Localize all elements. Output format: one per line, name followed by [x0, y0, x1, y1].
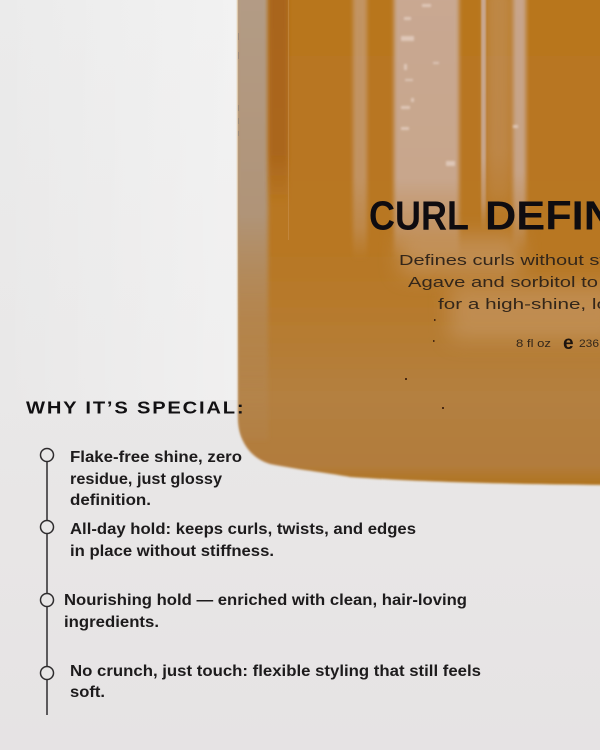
benefit 4: soft. [70, 684, 105, 701]
jar specks [405, 319, 444, 409]
jar label title: CURL [369, 192, 469, 238]
benefit 4 [70, 663, 481, 701]
benefit 3 [64, 592, 467, 631]
jar label volume: 8 fl oz [516, 338, 551, 350]
benefit 1: definition. [70, 492, 151, 509]
jar edge marks [238, 33, 239, 136]
jar glare specks [401, 4, 518, 166]
jar thin line [288, 0, 289, 240]
jar left edge reflection [236, 0, 268, 440]
benefit 4: No crunch, just touch: flexible styling that still feels [70, 663, 481, 680]
jar label line 3: for a high-shine, lo [438, 296, 600, 313]
timeline marker 1 [40, 448, 54, 462]
benefit 1: Flake-free shine, zero [70, 449, 242, 466]
heading: WHY IT’S SPECIAL: [26, 398, 245, 418]
jar label title [370, 201, 600, 230]
timeline marker 2 [40, 520, 54, 534]
jar dark band [269, 0, 288, 205]
jar label line 2: Agave and sorbitol to [408, 274, 598, 291]
benefit 2: in place without stiffness. [70, 543, 274, 560]
benefit 2 [70, 521, 416, 560]
timeline marker 4 [40, 666, 54, 680]
jar label volume metric: 236 [579, 338, 599, 350]
benefit 3: ingredients. [64, 614, 159, 631]
benefit 3: Nourishing hold — enriched with clean, hair-loving [64, 592, 467, 609]
product jar [236, 0, 600, 485]
benefit 2: All-day hold: keeps curls, twists, and edges [70, 521, 416, 538]
jar label estimated sign: e [563, 333, 574, 354]
benefit 1: residue, just glossy [70, 471, 222, 488]
jar label line 1: Defines curls without st [399, 252, 600, 269]
benefit 1 [70, 449, 242, 509]
timeline [40, 448, 54, 715]
timeline marker 3 [40, 594, 54, 606]
jar glare stripes [353, 0, 600, 340]
